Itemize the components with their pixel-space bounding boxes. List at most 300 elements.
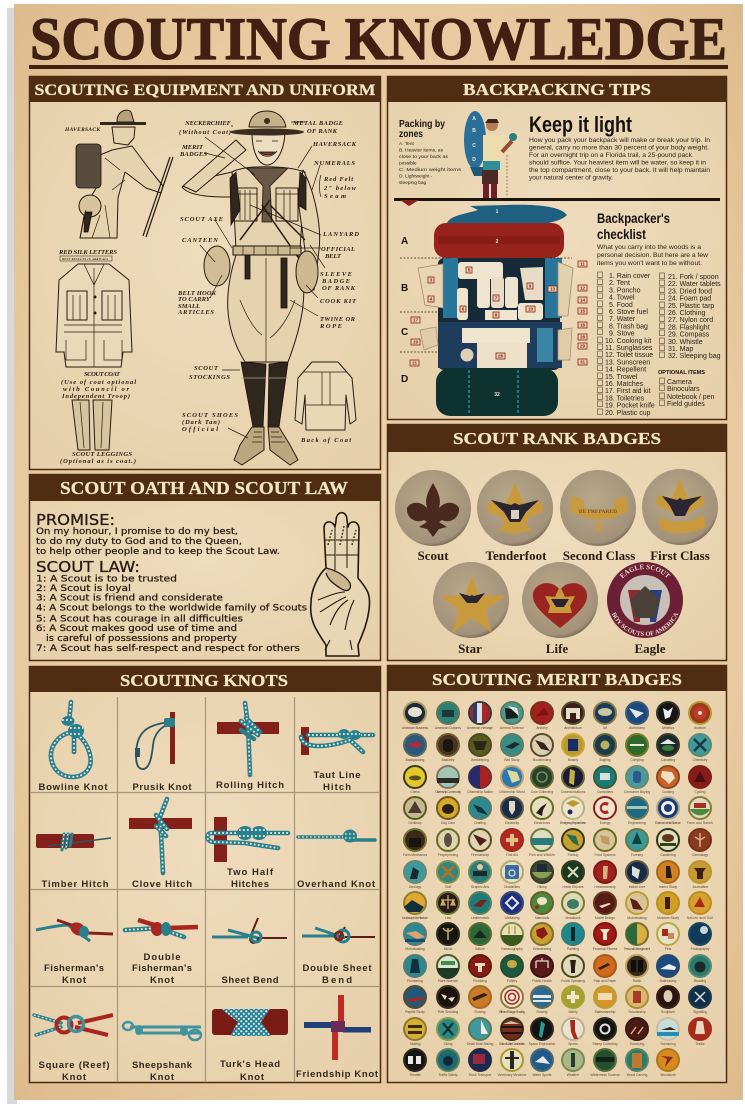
uniform labels: Official [182, 426, 218, 433]
merit badge row 5: Fish and Wildlife [529, 853, 555, 857]
merit badge row 10: Rifle and Shotgun Shooting [499, 1010, 525, 1014]
uniform labels: ARTICLES [177, 309, 214, 316]
text: promise: to do my duty to God and to the Queen, [36, 537, 242, 547]
knot: two half hitches: Hitches [231, 879, 269, 890]
text: keep it light: your natural center of gravity. [529, 174, 613, 182]
zone letters: D [401, 374, 408, 385]
merit badge row 7 [402, 892, 713, 920]
number tags on pack: 32 [494, 392, 500, 398]
panel: backpacking tips [387, 76, 727, 420]
merit badge row 6: Indian Lore [629, 885, 645, 889]
knot: square reef [34, 1015, 113, 1083]
merit badge row 7: Motorboating [627, 916, 647, 920]
uniform labels: (Dark Tan) [182, 419, 220, 426]
checklist column 2: 29. Compass [668, 332, 710, 338]
knot: bowline: Bowline Knot [38, 782, 108, 793]
knot: double fisherman's: Fisherman's [132, 963, 192, 974]
merit badge row 8: Nature [475, 947, 485, 951]
text: scout law: 6: A Scout makes good use of time and [36, 624, 237, 634]
merit badge row 11: Swimming [660, 1042, 676, 1046]
illustration: leggings: (Optional as is coat.) [60, 458, 136, 465]
merit badge row 12: Water Sports [532, 1073, 552, 1077]
zone letters: C [401, 327, 408, 338]
checklist column 1: 18. Toiletries [605, 396, 645, 402]
knot: timber hitch [36, 834, 111, 890]
merit badge row 7: Museum Study [657, 916, 679, 920]
text: keep it light [529, 112, 711, 182]
badge: Eagle [607, 562, 683, 656]
uniform labels: SLEEVE [320, 271, 353, 278]
merit badge row 12: Wilderness Survival [591, 1073, 620, 1077]
merit badge row 5: Gardening [660, 853, 676, 857]
merit badge row 5: First Aid [506, 853, 518, 857]
merit badge row 3: Citizenship World [499, 790, 525, 794]
merit badge row 1: American Heritage [467, 726, 493, 730]
checklist column 2: 24. Foam pad [668, 296, 711, 302]
merit badge row 5: Fishing [568, 853, 578, 857]
label: HAVERSACK [64, 127, 100, 133]
badge: Life: Life [546, 641, 568, 656]
text: packing by zones: possible [399, 160, 417, 166]
checklist column 1: 19. Pocket knife [605, 402, 655, 410]
text: promise [36, 511, 280, 557]
badge: Life [522, 562, 598, 656]
checklist column 1: 6. Stove fuel [609, 309, 648, 316]
text: scout law [36, 558, 307, 654]
merit badge row 3: Communications [561, 790, 586, 794]
knot: prusik [132, 712, 192, 793]
merit badge row 2: Bookbinding [533, 758, 551, 762]
number tags on pack: 31 [580, 360, 585, 365]
merit badge row 1: Architecture [564, 726, 582, 730]
merit badge row 12: Wood Carving [627, 1073, 648, 1077]
checklist column 1: 1. Rain cover [609, 273, 651, 280]
uniform labels: ROPE [319, 323, 343, 330]
optional items: OPTIONAL ITEMS [658, 370, 705, 376]
merit badge row 10 [404, 986, 711, 1014]
merit badge row 6: Golf [445, 885, 451, 889]
merit badge row 8: Personal Fitness [593, 947, 618, 951]
icon: hiker with pack: C [472, 143, 476, 149]
merit badge row 3: Citizenship Nation [467, 790, 493, 794]
number tags on pack: 4 [430, 297, 433, 302]
icon: hiker with pack: D [472, 157, 476, 163]
knot: fisherman's: Fisherman's [44, 963, 104, 974]
text: scout law: 5: A Scout has courage in all difficulties [36, 614, 243, 624]
merit badge row 1 [402, 702, 711, 730]
heading: knots: SCOUTING KNOTS [120, 671, 288, 690]
merit badge row 7: Model Design [595, 916, 615, 920]
merit badge row 4 [404, 797, 713, 825]
merit badge row 4: Engineering [628, 821, 646, 825]
merit badge row 2: Chemistry [693, 758, 708, 762]
merit badge row 11: Surveying [630, 1042, 644, 1046]
optional items [658, 370, 715, 408]
text: keep it light: the top compartment, close to your back. It will help maintain [529, 167, 711, 174]
merit badge row 3: Citizenship Community [435, 790, 461, 794]
merit badge row 1: Aviation [694, 726, 706, 730]
icon: hiker with pack: B [472, 128, 476, 134]
knot: sheet bend [212, 918, 287, 986]
merit badge row 11: Small Boat Sailing [467, 1042, 494, 1046]
panel: scouting equipment and uniform [29, 76, 381, 470]
checklist column 1 [598, 272, 655, 417]
uniform labels: 2" below [323, 185, 357, 192]
text: packing by zones: D. Lightweight - [399, 174, 433, 180]
merit badge row 2: Beekeeping [471, 758, 489, 762]
merit badge row 5 [403, 829, 711, 857]
text: promise: PROMISE: [36, 511, 115, 529]
badge: Star [433, 562, 509, 656]
merit badge row 3: Chess [410, 790, 420, 794]
knot: two half hitches [207, 817, 288, 890]
uniform labels: Back of Coat [300, 437, 351, 444]
merit badge row 9: Plumbing [473, 979, 487, 983]
badge: Tenderfoot: Tenderfoot [486, 548, 547, 563]
illustration: scout coat [56, 249, 136, 400]
merit badge row 11: Stamp Collecting [593, 1042, 618, 1046]
merit badge row 10: Salesmanship [595, 1010, 616, 1014]
uniform labels: BELT [324, 253, 342, 260]
checklist column 1: 5. Food [609, 302, 633, 309]
merit badge row 4: Energy [600, 821, 611, 825]
heading: backpacking: BACKPACKING TIPS [463, 80, 651, 99]
merit badge row 6: Insect Study [659, 885, 677, 889]
merit badge row 3 [404, 766, 711, 794]
merit badge row 9: Pulp and Paper [594, 979, 617, 983]
merit badge row 2: Basketry [442, 758, 455, 762]
badge: First Class: First Class [650, 548, 710, 563]
knot: sheepshank: Knot [150, 1072, 175, 1083]
merit badge row 11: Soil and Water Conservation [499, 1042, 525, 1046]
merit badge row 4: Electricity [505, 821, 519, 825]
uniform labels: SCOUT AXE [180, 216, 224, 223]
merit badge row 11 [404, 1018, 711, 1046]
merit badge row 2: Bird Study [504, 758, 520, 762]
checklist column 1: 11. Sunglasses [605, 345, 653, 352]
knot: turk's head: Knot [240, 1072, 265, 1083]
merit badge row 5: Forestry [631, 853, 643, 857]
badge: Tenderfoot [477, 470, 553, 563]
text: packing by zones: zones [399, 129, 423, 140]
knot: timber hitch: Timber Hitch [42, 879, 109, 890]
icon: hiker with pack [464, 111, 517, 198]
uniform labels: NUMERALS [313, 160, 355, 167]
badge: Second Class: Second Class [563, 548, 635, 563]
merit badge row 4: Farm and Ranch [687, 821, 713, 825]
merit badge row 10: Sculpture [661, 1010, 675, 1014]
knot: overhand: Overhand Knot [297, 879, 376, 890]
merit badge row 8: Motorboating [405, 947, 425, 951]
merit badge row 9: Railroading [660, 979, 677, 983]
text: backpacker's checklist: Backpacker's [597, 210, 670, 226]
merit badge row 4: Dentistry [408, 821, 422, 825]
knot: turk's head: Turk's Head [220, 1059, 280, 1070]
optional items: Camera [667, 379, 692, 386]
illustration: packed backpack [400, 205, 587, 416]
knot: friendship: Friendship Knot [296, 1069, 379, 1080]
badge: Star: Star [458, 641, 482, 656]
knot: prusik: Prusik Knot [132, 782, 192, 793]
knot: sheepshank: Sheepshank [132, 1060, 193, 1071]
checklist column 1: 9. Stove [609, 330, 635, 338]
merit badge row 8: Pets [665, 947, 672, 951]
knot: sheepshank [123, 1022, 201, 1083]
illustration: scout coat: (Use of coat optional [61, 379, 136, 386]
knot: taut line hitch: Hitch [323, 782, 351, 793]
checklist column 1: 7. Water [609, 316, 636, 323]
merit badge row 1: Athletics [662, 726, 675, 730]
number tags on pack: 6 [462, 307, 465, 312]
merit badge row 7: Metalwork [565, 916, 581, 920]
merit badge row 3: Coin Collecting [531, 790, 553, 794]
uniform labels: Seam [324, 193, 346, 200]
text: promise: to help other people and to keep the Scout Law. [36, 547, 280, 557]
merit badge row 2 [404, 734, 711, 762]
text: promise: On my honour, I promise to do my best, [36, 527, 238, 537]
checklist column 1: 2. Tent [609, 280, 630, 287]
text: keep it light: For an overnight trip on a Florida trail, a 25-pound pack [529, 152, 693, 159]
zone letters [401, 236, 408, 385]
number tags on pack [410, 209, 587, 398]
optional items: Field guides [667, 401, 705, 408]
merit badge row 7: Lifesaving [505, 916, 520, 920]
number tags on pack: 10 [528, 307, 533, 312]
merit badge row 9: Public Speaking [561, 979, 585, 983]
number tags on pack: 29 [580, 344, 585, 349]
merit badge row 7: Leatherwork [471, 916, 489, 920]
merit badge row 12: Truck Transport [469, 1073, 492, 1077]
badge: First Class [642, 469, 718, 563]
merit badge row 10: Rowing [536, 1010, 548, 1014]
panel: scout rank badges [386, 424, 728, 662]
merit badge row 11: Textile [695, 1042, 705, 1046]
number tags on pack: 5 [468, 268, 471, 273]
uniform labels: (Without Coat) [179, 129, 231, 136]
checklist column 2: 25. Plastic tarp [668, 303, 714, 310]
merit badge row 9: Pioneering [407, 979, 423, 983]
knot: sheet bend: Sheet Bend [222, 975, 279, 986]
merit badge row 8: Photography [691, 947, 710, 951]
merit badge row 9: Plant Science [438, 979, 458, 983]
knot: rolling hitch [216, 703, 284, 791]
merit badge row 12: Weather [567, 1073, 580, 1077]
knot: bowline [38, 702, 108, 793]
uniform labels: LANYARD [322, 231, 359, 238]
number tags on pack: 14 [580, 298, 585, 303]
merit badge row 8: Orienteering [533, 947, 551, 951]
merit badge row 1: Astronomy [629, 726, 645, 730]
knot: double sheet bend: Double Sheet [302, 963, 372, 974]
uniform labels: STOCKINGS [189, 374, 230, 381]
illustration: leggings: SCOUT LEGGINGS [72, 451, 132, 458]
merit badge row 7: Law [445, 916, 452, 920]
merit badge row 5: Genealogy [692, 853, 708, 857]
merit badge row 10: Reptile Study [405, 1010, 425, 1014]
text: scout law: 7: A Scout has self-respect and respect for others [36, 644, 300, 654]
merit badge row 2: Botany [568, 758, 578, 762]
merit badge row 6: Home Repairs [562, 885, 584, 889]
merit badge row 5: Farm Mechanics [403, 853, 428, 857]
zone letters: A [401, 236, 408, 247]
checklist column 1: 8. Trash bag [609, 324, 648, 330]
merit badge row 1: Animal Science [500, 726, 524, 730]
merit badge row 12: Theater [409, 1073, 422, 1077]
illustration: scout coat: Independent Troop) [61, 393, 130, 400]
uniform labels: Red Felt [323, 176, 353, 183]
text: backpacker's checklist: items you won't want to be without. [597, 260, 702, 267]
text: backpacker's checklist: checklist [597, 226, 646, 242]
merit badge row 9: Pottery [507, 979, 518, 983]
merit badge row 6: Graphic Arts [471, 885, 489, 889]
checklist column 1: 17. First aid kit [605, 388, 651, 395]
uniform labels: TWINE OR [320, 316, 356, 323]
text: backpacker's checklist [597, 210, 708, 267]
checklist column 1: 14. Repellent [605, 366, 646, 374]
merit badge row 4: Environmental Science [655, 821, 681, 825]
merit badge row 1: American Business [402, 726, 428, 730]
merit badge row 4: Dog Care [441, 821, 455, 825]
merit badge row 6: Horsemanship [594, 885, 616, 889]
merit badge row 3: Computers [597, 790, 613, 794]
knot: clove hitch: Clove Hitch [132, 879, 192, 890]
uniform labels: SMALL [178, 303, 200, 310]
text: scout law: 4: A Scout belongs to the worldwide family of Scouts [36, 604, 307, 614]
number tags on pack: 12 [580, 286, 585, 291]
badge: Scout [395, 470, 471, 563]
illustration: scout coat: BEST RESULTS IN ARRIVALS [61, 257, 108, 261]
optional items: Binoculars [667, 386, 700, 393]
text: keep it light: general, carry no more than 30 percent of your body weight. [529, 144, 709, 152]
knot: taut line hitch [301, 727, 373, 793]
merit badge row 8 [404, 923, 711, 951]
knot: taut line hitch: Taut Line [314, 770, 360, 781]
illustration: back of coat [295, 362, 356, 430]
knot: two half hitches: Two Half [227, 867, 274, 878]
panel: scout oath and scout law [29, 474, 381, 660]
badge: Scout: Scout [417, 548, 449, 563]
uniform labels: BADGE [321, 278, 351, 285]
knot: rolling hitch: Rolling Hitch [216, 780, 284, 791]
merit badge row 10: Signaling [693, 1010, 707, 1014]
heading: oath: SCOUT OATH AND SCOUT LAW [60, 478, 348, 498]
checklist column 1: 15. Trowel [605, 374, 638, 381]
number tags on pack: 28 [580, 335, 585, 340]
checklist column 1: 4. Towel [609, 294, 635, 302]
checklist column 2: 23. Dried food [668, 288, 712, 296]
merit badge row 1: American Cultures [435, 726, 461, 730]
checklist column 2: 21. Fork / spoon [668, 274, 719, 281]
text: packing by zones: A. Tent [399, 141, 415, 147]
knot: turk's head [212, 1009, 288, 1083]
merit badge row 1: Art [603, 726, 607, 730]
merit badge row 11: Skating [410, 1042, 421, 1046]
merit badge row 8: Music [444, 947, 453, 951]
number tags on pack: 7 [495, 296, 498, 301]
panel: scouting merit badges [387, 665, 727, 1082]
number tags on pack: 17 [413, 318, 418, 323]
badge: Eagle: EAGLE SCOUT [619, 564, 670, 578]
number tags on pack: 15 [580, 309, 585, 314]
checklist column 1: 20. Plastic cup [605, 410, 651, 417]
checklist column 2: 30. Whistle [668, 339, 703, 346]
merit badge row 6 [404, 861, 711, 889]
number tags on pack: 21 [412, 361, 417, 366]
number tags on pack: 11 [580, 262, 585, 267]
merit badge row 10: Scholarship [628, 1010, 646, 1014]
knot: double fisherman's: Double [144, 952, 180, 963]
text: keep it light: Keep it light [529, 112, 633, 137]
merit badge row 9 [404, 955, 711, 983]
merit badge row 12 [404, 1049, 679, 1077]
text: backpacker's checklist: What you carry into the woods is a [597, 244, 701, 251]
number tags on pack: 3 [430, 278, 433, 283]
merit badge row 10: Safety [568, 1010, 578, 1014]
knot: square reef: Knot [62, 1072, 87, 1083]
uniform labels: CANTEEN [182, 237, 218, 244]
knot: double fisherman's: Knot [150, 975, 175, 986]
merit badge row 12: Traffic Safety [438, 1073, 458, 1077]
checklist column 2: 28. Flashlight [668, 324, 710, 332]
merit badge row 9: Public Health [532, 979, 552, 983]
merit badge row 7: Nature and Soil [687, 916, 713, 920]
merit badge row 11: Space Exploration [529, 1042, 556, 1046]
illustration: saluting scout [182, 111, 320, 465]
text: keep it light: should suffice. Your heaviest item will be water, so keep it in [529, 160, 707, 166]
coat labels: RED SILK LETTERS [58, 249, 117, 256]
merit badge row 7: Mammals [535, 916, 549, 920]
uniform labels: SCOUT SHOES [182, 412, 238, 419]
text: packing by zones [399, 119, 462, 186]
uniform labels: METAL BADGE [292, 120, 344, 127]
text: scout law: is careful of possessions and property [46, 634, 238, 644]
merit badge row 5: Food Systems [594, 853, 616, 857]
merit badge row 5: Fingerprinting [438, 853, 458, 857]
merit badge row 4: Emergency Preparedness [560, 821, 586, 825]
text: scout law: 1: A Scout is to be trusted [36, 574, 177, 584]
merit badge row 5: Firemanship [471, 853, 489, 857]
merit badge row 2: Canoeing [661, 758, 675, 762]
zone letters: B [401, 283, 408, 294]
merit badge row 6: Hiking [537, 885, 547, 889]
text: packing by zones: C. Medium weight items [399, 167, 462, 173]
illustration: scout coat: with Council or [63, 386, 129, 393]
checklist column 2 [660, 273, 721, 360]
text: scout law: 3: A Scout is friend and considerate [36, 594, 224, 604]
poster shadow [7, 8, 17, 1104]
panel: scouting knots [29, 666, 381, 1083]
badge: Eagle: Eagle [634, 641, 666, 656]
merit badge row 6: Journalism [692, 885, 708, 889]
text: backpacker's checklist: personal decision. But here are a few [597, 252, 708, 259]
number tags on pack: 19 [413, 340, 418, 345]
merit badge row 3: Cycling [695, 790, 706, 794]
number tags on pack: 2 [496, 239, 499, 245]
merit badge row 11: Skiing [444, 1042, 453, 1046]
merit badge row 4: Electronics [534, 821, 550, 825]
merit badge row 2: Bugling [600, 758, 611, 762]
checklist column 2: 32. Sleeping bag [668, 353, 721, 360]
merit badge row 10: Rifle Shooting [438, 1010, 458, 1014]
merit badge row 9: Radio [633, 979, 641, 983]
knot: double sheet bend: Bend [322, 975, 352, 986]
leader lines [200, 122, 325, 438]
merit badge row 8: Personal Management [624, 947, 650, 951]
knot: square reef: Square (Reef) [38, 1060, 110, 1071]
illustration: hiking scout [64, 110, 173, 238]
uniform labels: OF RANK [322, 285, 356, 292]
text: packing by zones: Packing by [399, 119, 445, 130]
